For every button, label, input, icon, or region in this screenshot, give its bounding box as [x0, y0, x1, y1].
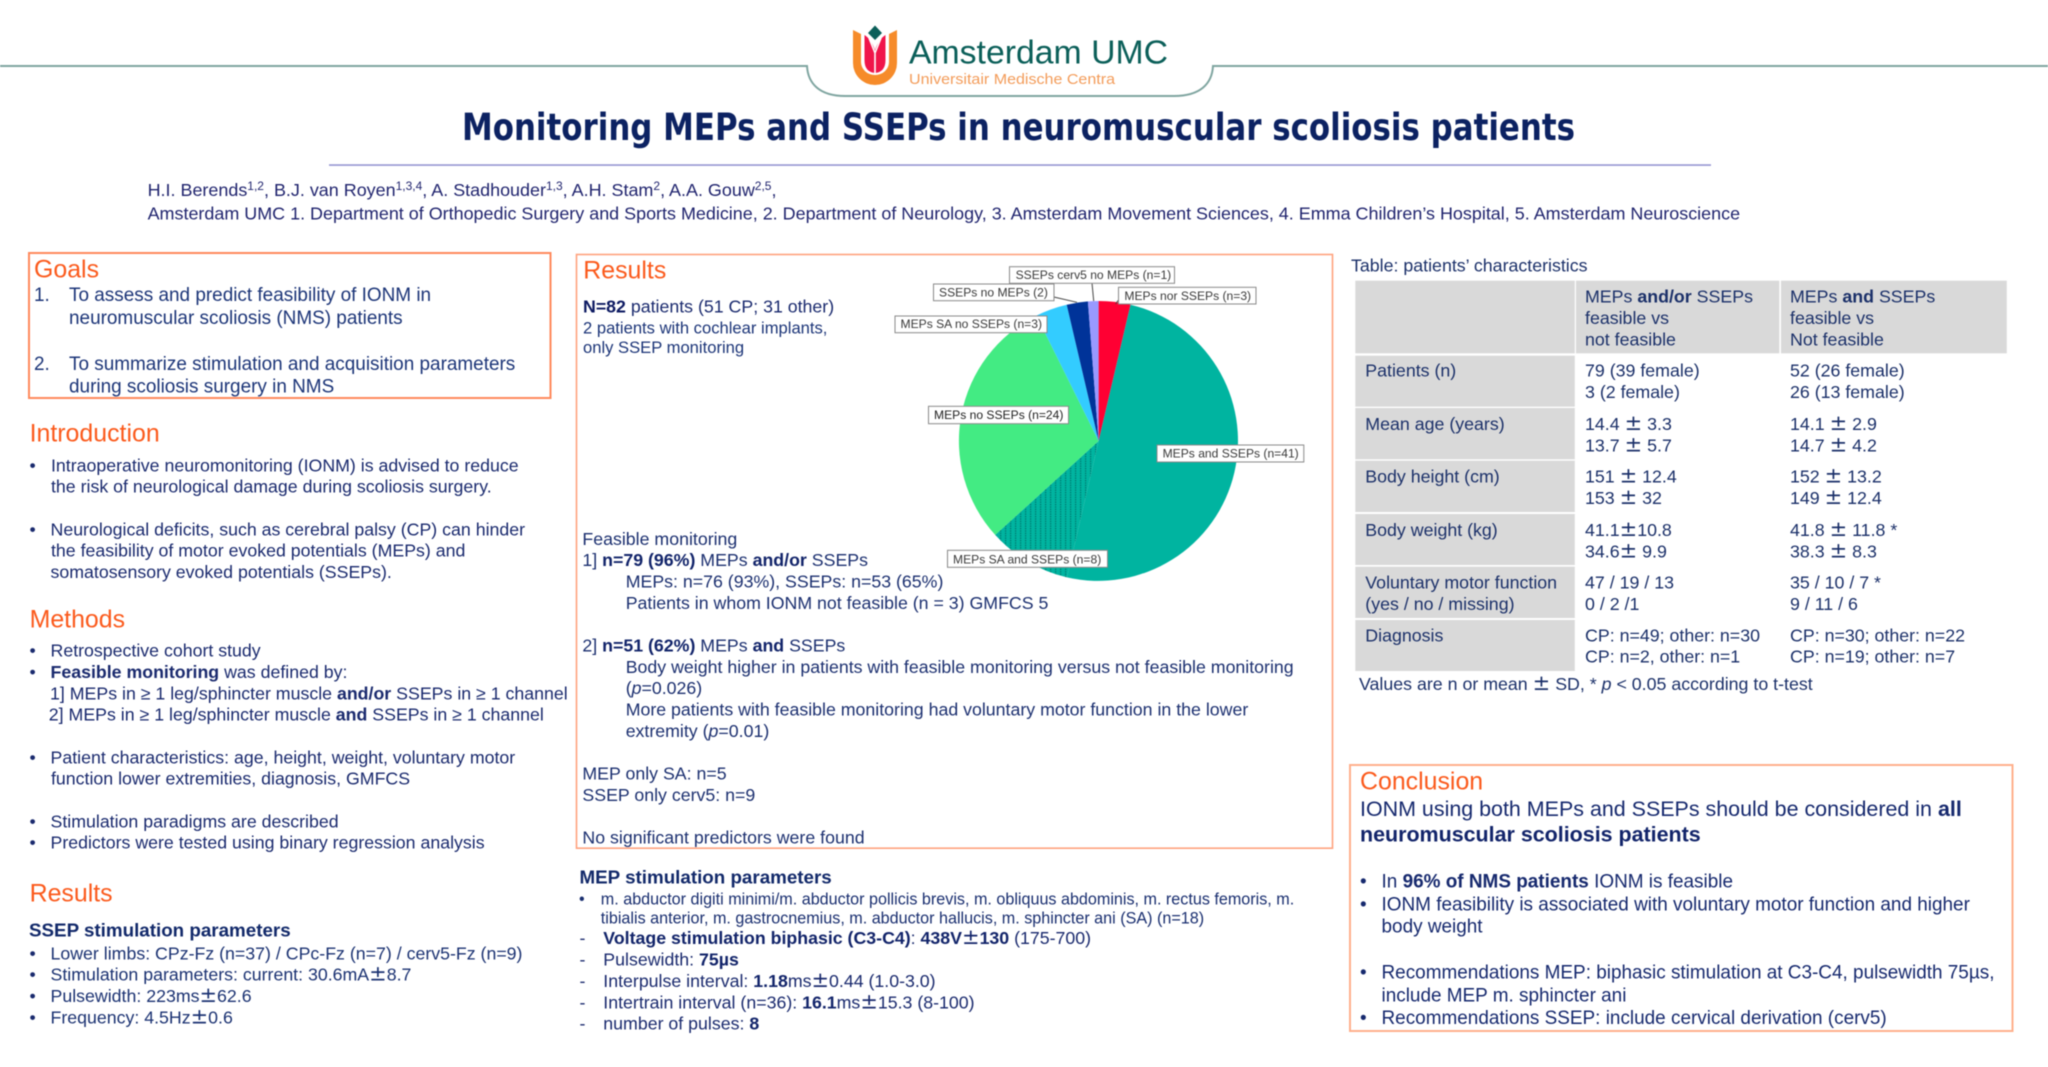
feasible monitoring text: SSEP only cerv5: n=9	[582, 785, 755, 805]
methods bullets: function lower extremities, diagnosis, GMFCS	[51, 769, 410, 789]
feasible monitoring text: Body weight higher in patients with feasible monitoring versus not feasible monitoring	[626, 657, 1294, 677]
row: voluntary motor function: 35 / 10 / 7 *	[1790, 573, 1881, 593]
row: voluntary motor function: (yes / no / missing)	[1365, 594, 1515, 614]
introduction bullets: the feasibility of motor evoked potentials (MEPs) and	[51, 541, 465, 561]
introduction bullets: Intraoperative neuromonitoring (IONM) is advised to reduce	[51, 455, 519, 475]
methods bullets: 2] MEPs in ≥ 1 leg/sphincter muscle and SSEPs in ≥ 1 channel	[49, 705, 544, 725]
pie label: MEPs and SSEPs: MEPs and SSEPs (n=41)	[1163, 446, 1299, 460]
conclusion statement: IONM using both MEPs and SSEPs should be considered in all	[1360, 797, 1962, 821]
feasible monitoring text: 1] n=79 (96%) MEPs and/or SSEPs	[582, 550, 868, 570]
conclusion bullets	[1360, 871, 1994, 1029]
row: diagnosis: Diagnosis	[1365, 625, 1443, 645]
row: patients: 52 (26 female)	[1790, 361, 1905, 381]
row: mean age: 13.7 ± 5.7	[1585, 432, 1672, 456]
feasible monitoring text: (p=0.026)	[626, 678, 702, 698]
row: patients: Patients (n)	[1365, 361, 1456, 381]
SSEP bullets: •	[30, 986, 36, 1006]
methods bullets: •	[30, 747, 36, 767]
methods bullets: Feasible monitoring was defined by:	[50, 662, 347, 682]
row: body weight: 41.1±10.8	[1585, 517, 1672, 541]
parameter list: -	[580, 950, 586, 970]
introduction bullets	[30, 455, 525, 582]
methods bullets: Retrospective cohort study	[50, 641, 261, 661]
conclusion bullets: IONM feasibility is associated with voluntary motor function and higher	[1382, 895, 1970, 916]
heading: results: Results	[583, 256, 666, 284]
authors and affiliations: , A.A. Gouw	[660, 180, 755, 200]
patient summary: only SSEP monitoring	[583, 338, 744, 357]
row: voluntary motor function	[1365, 573, 1881, 614]
table heading: Table: patients’ characteristics	[1351, 256, 1588, 276]
row: body weight: 41.8 ± 11.8 *	[1790, 517, 1897, 541]
feasible monitoring text: More patients with feasible monitoring had voluntary motor function in the lower	[626, 700, 1248, 720]
row: patients: 26 (13 female)	[1790, 382, 1905, 402]
logo: Amsterdam UMC	[853, 26, 1168, 88]
row: voluntary motor function: 0 / 2 /1	[1585, 594, 1639, 614]
heading: introduction: Introduction	[30, 420, 160, 448]
methods bullets: 1] MEPs in ≥ 1 leg/sphincter muscle and/or SSEPs in ≥ 1 channel	[50, 683, 568, 703]
muscle list: tibialis anterior, m. gastrocnemius, m. abductor hallucis, m. sphincter ani (SA) (n=18)	[601, 910, 1204, 928]
subheading: SSEP stimulation parameters: SSEP stimulation parameters	[29, 920, 291, 941]
row: body weight: Body weight (kg)	[1365, 520, 1498, 540]
row: diagnosis: CP: n=30; other: n=22	[1790, 625, 1965, 645]
goals list	[34, 285, 515, 398]
introduction bullets: •	[30, 455, 36, 475]
pie label: SSEPs no MEPs: SSEPs no MEPs (2)	[939, 286, 1048, 300]
table header	[1585, 287, 1935, 349]
conclusion bullets: body weight	[1382, 917, 1483, 938]
conclusion bullets: Recommendations SSEP: include cervical derivation (cerv5)	[1382, 1008, 1887, 1029]
authors and affiliations: , A. Stadhouder	[422, 180, 546, 200]
heading: methods: Methods	[30, 605, 125, 633]
heading: conclusion: Conclusion	[1360, 767, 1483, 795]
introduction bullets: somatosensory evoked potentials (SSEPs).	[50, 562, 392, 582]
pie label: MEPs SA and SSEPs: MEPs SA and SSEPs (n=8)	[953, 552, 1101, 566]
parameter list: Intertrain interval (n=36): 16.1ms±15.3 (8-100)	[603, 989, 975, 1013]
SSEP bullets: •	[30, 1007, 36, 1027]
parameter list	[580, 925, 1091, 1034]
feasible monitoring text	[582, 529, 1294, 848]
methods bullets	[30, 641, 568, 853]
feasible monitoring text: extremity (p=0.01)	[626, 721, 769, 741]
row: mean age: Mean age (years)	[1365, 414, 1505, 434]
row: body height	[1365, 464, 1882, 509]
feasible monitoring text: MEP only SA: n=5	[582, 764, 727, 784]
row: mean age	[1365, 411, 1877, 456]
conclusion statement	[1360, 797, 1962, 846]
row: mean age: 14.1 ± 2.9	[1790, 411, 1877, 435]
panel: conclusion	[1350, 765, 2012, 1031]
SSEP bullets: •	[30, 965, 36, 985]
authors and affiliations	[148, 179, 1740, 223]
methods bullets: Stimulation paradigms are described	[50, 811, 339, 831]
panel: results	[576, 254, 1332, 848]
parameter list: Voltage stimulation biphasic (C3-C4): 438V±130 (175-700)	[603, 925, 1091, 949]
row: diagnosis: CP: n=2, other: n=1	[1585, 647, 1740, 667]
patient summary: 2 patients with cochlear implants,	[583, 318, 827, 337]
goals list: neuromuscular scoliosis (NMS) patients	[69, 308, 403, 329]
SSEP bullets: Frequency: 4.5Hz±0.6	[50, 1004, 233, 1028]
row: mean age: 14.4 ± 3.3	[1585, 411, 1672, 435]
logo: Amsterdam UMC: Amsterdam UMC	[909, 34, 1168, 71]
goals list: 2.	[34, 354, 50, 375]
table header: not feasible	[1585, 329, 1676, 349]
introduction bullets: Neurological deficits, such as cerebral palsy (CP) can hinder	[50, 519, 525, 539]
conclusion statement: neuromuscular scoliosis patients	[1360, 822, 1701, 846]
icon: tulip	[853, 26, 897, 85]
parameter list: -	[580, 992, 586, 1012]
pie chart: monitoring feasibility	[895, 267, 1304, 581]
row: body height: 151 ± 12.4	[1585, 464, 1677, 488]
row: patients: 3 (2 female)	[1585, 382, 1680, 402]
table header: MEPs and/or SSEPs	[1585, 287, 1753, 307]
pie label: MEPs nor SSEPs: MEPs nor SSEPs (n=3)	[1124, 289, 1251, 303]
row: voluntary motor function: 9 / 11 / 6	[1790, 594, 1858, 614]
methods bullets: Predictors were tested using binary regression analysis	[50, 833, 485, 853]
methods bullets: •	[30, 811, 36, 831]
feasible monitoring text: No significant predictors were found	[582, 828, 865, 848]
section: methods	[30, 605, 568, 853]
heading: goals: Goals	[34, 256, 99, 284]
conclusion bullets: include MEP m. sphincter ani	[1382, 985, 1626, 1006]
muscle list	[579, 890, 1294, 928]
methods bullets: •	[30, 662, 36, 682]
parameter list: Pulsewidth: 75µs	[603, 950, 739, 970]
title: Monitoring MEPs and SSEPs in neuromuscular scoliosis patients	[462, 106, 1575, 149]
parameter list: -	[580, 971, 586, 991]
authors and affiliations: ,	[771, 180, 776, 200]
row: body height: 153 ± 32	[1585, 485, 1662, 509]
header rule with logo tab	[0, 66, 2048, 96]
parameter list: -	[580, 928, 586, 948]
SSEP bullets: Pulsewidth: 223ms±62.6	[50, 983, 252, 1007]
conclusion bullets: In 96% of NMS patients IONM is feasible	[1382, 871, 1733, 892]
parameter list: number of pulses: 8	[603, 1014, 759, 1034]
authors and affiliations: 2	[653, 179, 660, 193]
panel: goals	[29, 253, 550, 398]
row: body height: Body height (cm)	[1365, 467, 1500, 487]
authors and affiliations: 1,3,4	[396, 179, 423, 193]
muscle list: m. abductor digiti minimi/m. abductor pollicis brevis, m. obliquus abdominis, m. rectus femoris, m.	[601, 890, 1294, 908]
authors and affiliations: Amsterdam UMC 1. Department of Orthopedic Surgery and Sports Medicine, 2. Department of Neurology, 3. Amsterdam Movement Sciences, 4. Emma Children’s Hospital, 5. Amsterdam Neuroscience	[148, 203, 1740, 223]
logo: Amsterdam UMC: Universitair Medische Centra	[909, 71, 1116, 88]
SSEP bullets: Stimulation parameters: current: 30.6mA±8.7	[50, 962, 411, 986]
goals list: during scoliosis surgery in NMS	[69, 377, 334, 398]
goals list: 1.	[34, 285, 50, 306]
table header: MEPs and SSEPs	[1790, 287, 1935, 307]
SSEP bullets: Lower limbs: CPz-Fz (n=37) / CPc-Fz (n=7) / cerv5-Fz (n=9)	[50, 943, 522, 963]
methods bullets: •	[30, 833, 36, 853]
feasible monitoring text: MEPs: n=76 (93%), SSEPs: n=53 (65%)	[626, 572, 943, 592]
parameter list: Interpulse interval: 1.18ms±0.44 (1.0-3.0)	[603, 968, 936, 992]
row: body height: 149 ± 12.4	[1790, 485, 1882, 509]
row: mean age: 14.7 ± 4.2	[1790, 432, 1877, 456]
parameter list: -	[580, 1014, 586, 1034]
SSEP bullets	[30, 943, 522, 1028]
row: voluntary motor function: Voluntary motor function	[1365, 573, 1557, 593]
pie label: MEPs no SSEPs: MEPs no SSEPs (n=24)	[934, 408, 1063, 422]
row: diagnosis	[1365, 625, 1965, 667]
table header: Not feasible	[1790, 329, 1884, 349]
row: diagnosis: CP: n=49; other: n=30	[1585, 625, 1760, 645]
section: results, SSEP stimulation parameters	[29, 879, 522, 1028]
row: body height: 152 ± 13.2	[1790, 464, 1882, 488]
row: patients: 79 (39 female)	[1585, 361, 1700, 381]
table: patients' characteristics	[1355, 281, 2007, 671]
section: introduction	[30, 420, 525, 582]
authors and affiliations: 1,2	[247, 179, 264, 193]
section: MEP stimulation parameters	[579, 867, 1294, 1034]
authors and affiliations: H.I. Berends	[148, 180, 247, 200]
row: patients	[1365, 361, 1905, 402]
row: diagnosis: CP: n=19; other: n=7	[1790, 647, 1955, 667]
introduction bullets: •	[30, 519, 36, 539]
conclusion bullets: •	[1360, 1008, 1367, 1029]
row: voluntary motor function: 47 / 19 / 13	[1585, 573, 1674, 593]
feasible monitoring text: Patients in whom IONM not feasible (n = 3) GMFCS 5	[626, 593, 1049, 613]
methods bullets: Patient characteristics: age, height, weight, voluntary motor	[50, 747, 515, 767]
conclusion bullets: Recommendations MEP: biphasic stimulation at C3-C4, pulsewidth 75µs,	[1382, 963, 1994, 984]
patient summary: N=82 patients (51 CP; 31 other)	[583, 297, 834, 317]
conclusion bullets: •	[1360, 963, 1367, 984]
authors and affiliations: 1,3	[546, 179, 563, 193]
authors and affiliations: , B.J. van Royen	[264, 180, 396, 200]
table footnote: Values are n or mean ± SD, * p < 0.05 according to t-test	[1359, 671, 1813, 695]
row: body weight: 38.3 ± 8.3	[1790, 538, 1877, 562]
goals list: To summarize stimulation and acquisition parameters	[69, 354, 515, 375]
table header: feasible vs	[1585, 308, 1669, 328]
conclusion bullets: •	[1360, 895, 1367, 916]
methods bullets: •	[30, 641, 36, 661]
subheading: MEP stimulation parameters: MEP stimulation parameters	[580, 867, 832, 888]
introduction bullets: the risk of neurological damage during scoliosis surgery.	[51, 477, 492, 497]
heading: results: Results	[30, 879, 113, 907]
goals list: To assess and predict feasibility of IONM in	[69, 285, 431, 306]
row: body weight: 34.6± 9.9	[1585, 538, 1667, 562]
muscle list: •	[579, 890, 585, 908]
table header: feasible vs	[1790, 308, 1874, 328]
feasible monitoring text: Feasible monitoring	[582, 529, 737, 549]
SSEP bullets: •	[30, 943, 36, 963]
feasible monitoring text: 2] n=51 (62%) MEPs and SSEPs	[582, 636, 845, 656]
conclusion bullets: •	[1360, 871, 1367, 892]
pie label: MEPs SA no SSEPs: MEPs SA no SSEPs (n=3)	[900, 317, 1042, 331]
pie label: SSEPs cerv5 no MEPs: SSEPs cerv5 no MEPs (n=1)	[1016, 268, 1171, 282]
row: body weight	[1365, 517, 1897, 562]
authors and affiliations: 2,5	[755, 179, 772, 193]
authors and affiliations: , A.H. Stam	[563, 180, 653, 200]
patient summary	[583, 297, 834, 357]
